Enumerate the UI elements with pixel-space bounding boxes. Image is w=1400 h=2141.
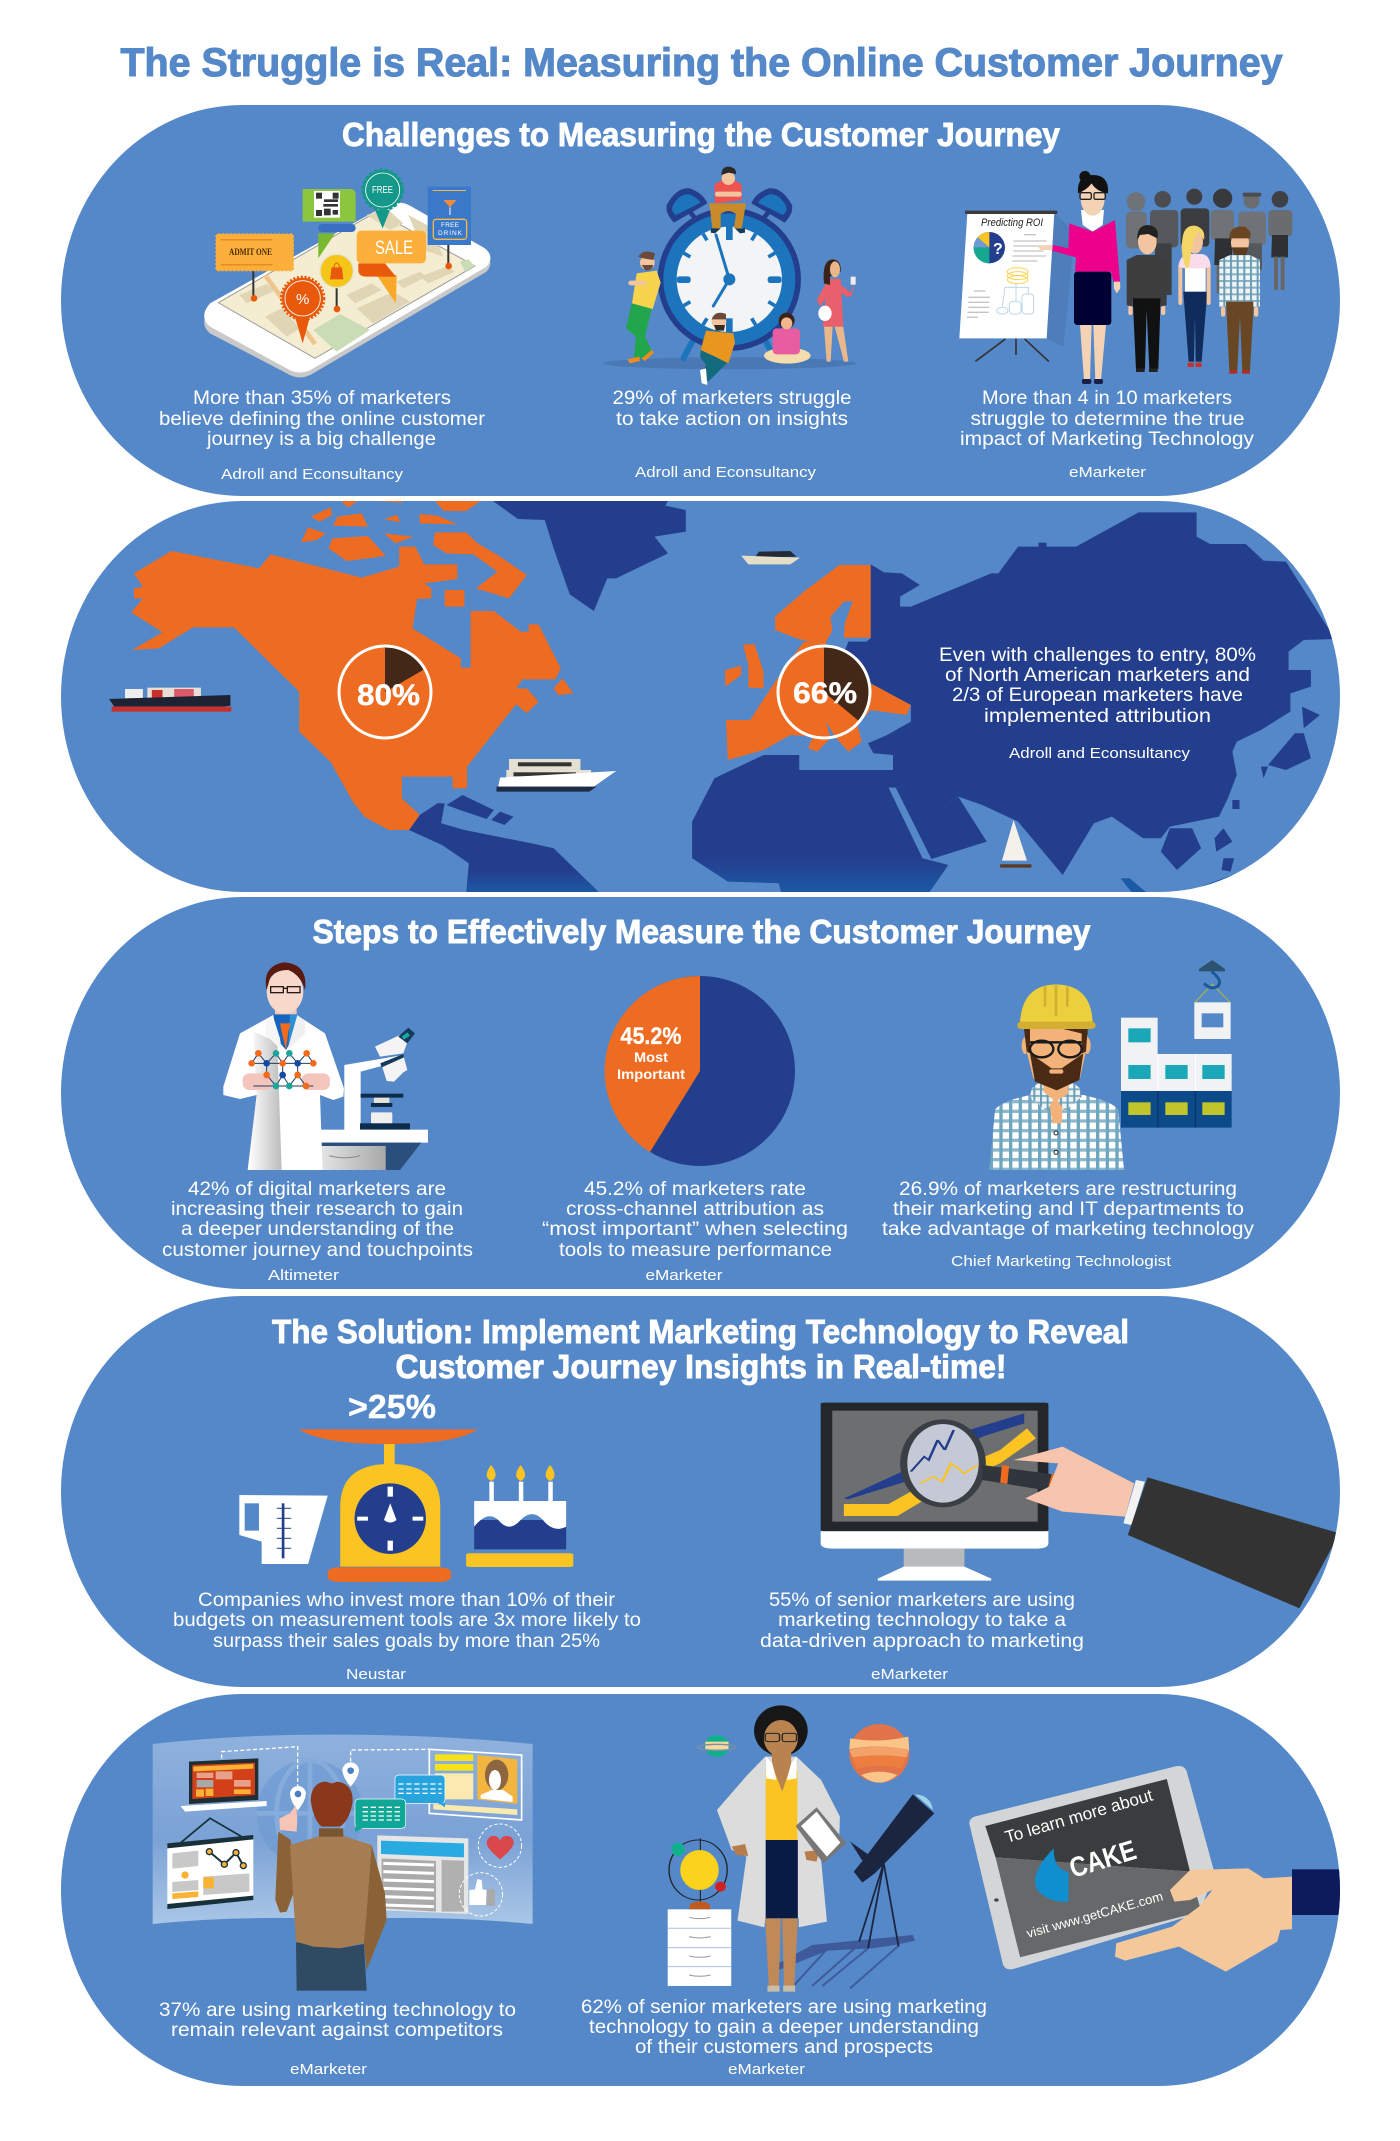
text: 29% stat: 29% of marketers struggle — [612, 388, 852, 409]
chart: pie 45.2%: Important — [617, 1066, 685, 1082]
text: 26.9% stat: 26.9% of marketers are restructuring — [899, 1179, 1237, 1200]
pins — [290, 1762, 359, 1811]
globe on cabinet — [668, 1838, 731, 1986]
chart: pie 45.2%: Most — [634, 1049, 668, 1065]
label: CAKE logo: CAKE — [1066, 1834, 1140, 1884]
text: attribution stat — [939, 645, 1256, 762]
panel: challenges — [61, 105, 1340, 496]
icon: phone with map pins — [204, 170, 490, 377]
audience back row — [1126, 189, 1292, 295]
news card — [377, 1835, 468, 1914]
icon: scientist with microscope — [223, 962, 428, 1170]
text: 26.9% stat — [882, 1179, 1255, 1270]
text: 45.2% stat: “most important” when selecting — [542, 1219, 848, 1240]
text: 37% stat: 37% are using marketing technology to — [159, 2000, 516, 2021]
panel: steps — [61, 897, 1340, 1289]
icon: alarm clock with people — [603, 167, 856, 385]
label: website: visit www.getCAKE.com — [1025, 1889, 1165, 1941]
text: 55% stat: marketing technology to take a — [778, 1610, 1066, 1631]
text: 55% stat: 55% of senior marketers are using — [769, 1590, 1075, 1611]
heading: steps: Steps to Effectively Measure the Customer Journey — [312, 914, 1091, 951]
text: 35% stat — [159, 388, 486, 483]
text: 4 in 10 stat — [960, 388, 1255, 481]
icon: man with augmented reality screen — [153, 1735, 533, 1991]
text: 55% stat: eMarketer — [871, 1666, 948, 1683]
Africa — [692, 755, 948, 893]
person sitting bottom — [700, 313, 735, 385]
chart: pie 45.2% — [605, 976, 795, 1166]
ship: small yacht — [741, 551, 800, 564]
icon: monitor with magnifier and hand — [821, 1403, 1340, 1608]
text: 42% stat: 42% of digital marketers are — [188, 1179, 446, 1200]
person sitting pink — [764, 313, 811, 364]
text: 42% stat: increasing their research to gain — [171, 1199, 463, 1220]
text: attribution stat: 2/3 of European marketers have — [952, 685, 1243, 706]
text: 62% stat: eMarketer — [728, 2061, 805, 2078]
panel: world map — [61, 501, 1340, 893]
text: measurement stat: surpass their sales goals by more than 25% — [213, 1631, 600, 1652]
panel: solution — [61, 1296, 1340, 1687]
text: attribution stat: of North American marketers and — [945, 665, 1250, 686]
planet: orange — [849, 1724, 909, 1783]
text: 29% stat: to take action on insights — [616, 409, 848, 430]
world map — [109, 501, 1335, 893]
Eurasia — [844, 512, 1335, 875]
South America — [409, 803, 600, 893]
laptop — [181, 1758, 267, 1812]
text: 45.2% stat: eMarketer — [646, 1267, 722, 1284]
label: chart title: Predicting ROI — [981, 217, 1043, 229]
text: 62% stat: 62% of senior marketers are using marketing — [581, 1997, 987, 2018]
text: measurement stat: budgets on measurement tools are 3x more likely to — [173, 1610, 641, 1631]
label: tablet line 1: To learn more about — [1003, 1786, 1155, 1847]
Greenland — [493, 501, 686, 611]
text: 62% stat: technology to gain a deeper understanding — [589, 2017, 979, 2038]
text: 62% stat — [581, 1997, 987, 2078]
text: measurement stat: Companies who invest more than 10% of their — [198, 1590, 616, 1611]
man front — [1127, 225, 1167, 372]
text: measurement stat — [173, 1590, 641, 1683]
text: 29% stat — [612, 388, 852, 481]
text: 4 in 10 stat: More than 4 in 10 marketers — [982, 388, 1232, 409]
text: 4 in 10 stat: impact of Marketing Technology — [960, 429, 1255, 450]
text: 55% stat — [760, 1590, 1084, 1683]
icon: construction worker and building — [989, 960, 1232, 1170]
label: free drink: DRINK — [438, 230, 463, 237]
man plaid — [1219, 226, 1260, 374]
text: attribution stat: implemented attribution — [984, 706, 1211, 727]
text: 35% stat: believe defining the online customer — [159, 409, 486, 430]
text: 4 in 10 stat: struggle to determine the true — [970, 409, 1244, 430]
thumbs up — [459, 1873, 503, 1916]
text: 35% stat: More than 35% of marketers — [193, 388, 451, 409]
text: 62% stat: of their customers and prospects — [635, 2037, 933, 2058]
label: more than 25%: >25% — [348, 1388, 436, 1425]
text: 37% stat: eMarketer — [290, 2061, 367, 2078]
panel: results — [61, 1694, 1341, 2086]
heading: solution — [272, 1314, 1129, 1386]
label: pie question mark: ? — [993, 241, 1003, 258]
label: ticket: ADMIT ONE — [229, 247, 272, 257]
icon: hand holding tablet with CAKE ad — [969, 1766, 1341, 1972]
text: 4 in 10 stat: eMarketer — [1069, 464, 1146, 481]
planet: striped small — [698, 1735, 736, 1757]
text: 35% stat: journey is a big challenge — [206, 429, 436, 450]
East Asia islands — [1302, 707, 1320, 728]
text: 45.2% stat: cross-channel attribution as — [566, 1199, 824, 1220]
text: 55% stat: data-driven approach to marketing — [760, 1631, 1084, 1652]
text: 42% stat — [162, 1179, 473, 1284]
label: free: FREE — [372, 185, 393, 196]
man — [275, 1782, 387, 1991]
heading: solution: The Solution: Implement Marketing Technology to Reveal — [272, 1314, 1129, 1351]
Europe — [725, 565, 911, 760]
text: 45.2% stat: tools to measure performance — [559, 1240, 832, 1261]
person on clock — [709, 167, 746, 233]
text: 35% stat: Adroll and Econsultancy — [221, 466, 404, 483]
icon: scale, jug and cake — [239, 1429, 573, 1582]
person left — [626, 251, 661, 363]
text: 45.2% stat — [542, 1179, 848, 1284]
heading: solution: Customer Journey Insights in Real-time! — [396, 1349, 1006, 1386]
label: free drink: FREE — [441, 222, 460, 229]
text: 26.9% stat: Chief Marketing Technologist — [951, 1253, 1172, 1270]
poster — [167, 1818, 253, 1909]
woman — [717, 1705, 847, 1992]
text: 29% stat: Adroll and Econsultancy — [635, 464, 817, 481]
presenter — [1037, 171, 1120, 384]
text: 42% stat: customer journey and touchpoints — [162, 1240, 473, 1261]
chart: 66% circle: 66% — [793, 677, 857, 710]
text: 37% stat — [159, 2000, 516, 2078]
Arabia — [896, 788, 987, 859]
text: attribution stat: Even with challenges to entry, 80% — [939, 645, 1256, 666]
text: 26.9% stat: take advantage of marketing technology — [882, 1219, 1255, 1240]
text: 37% stat: remain relevant against competitors — [171, 2020, 503, 2041]
icon: presenter with audience and chart — [959, 171, 1292, 384]
icon: woman scientist with telescope and planets — [668, 1705, 934, 1992]
person standing right — [817, 259, 856, 362]
ship: cargo — [109, 688, 231, 712]
ship: sailboat — [1000, 820, 1031, 868]
text: 42% stat: a deeper understanding of the — [181, 1219, 454, 1240]
chart: pie 45.2%: 45.2% — [620, 1023, 682, 1050]
label: sale: SALE — [375, 238, 413, 259]
telescope — [850, 1794, 934, 1948]
heart — [478, 1824, 522, 1867]
chat bubbles — [355, 1775, 445, 1832]
title: The Struggle is Real: Measuring the Online Customer Journey — [120, 41, 1283, 85]
text: 45.2% stat: 45.2% of marketers rate — [584, 1179, 806, 1200]
Caribbean — [446, 795, 494, 819]
woman front — [1178, 226, 1211, 367]
ship: large yacht — [497, 759, 616, 792]
label: free drink — [438, 222, 463, 237]
chart: 80% circle: 80% — [357, 679, 420, 712]
heading: challenges: Challenges to Measuring the Customer Journey — [342, 117, 1060, 154]
label: percent: % — [296, 291, 309, 308]
chart: 80% circle — [339, 645, 431, 738]
text: 42% stat: Altimeter — [268, 1267, 339, 1284]
text: attribution stat: Adroll and Econsultancy — [1009, 745, 1191, 762]
chart: 66% circle — [778, 645, 871, 738]
text: 26.9% stat: their marketing and IT departments to — [893, 1199, 1244, 1220]
Arctic islands — [301, 501, 573, 695]
North America — [131, 547, 561, 830]
text: measurement stat: Neustar — [346, 1666, 406, 1683]
profile card — [429, 1749, 522, 1820]
